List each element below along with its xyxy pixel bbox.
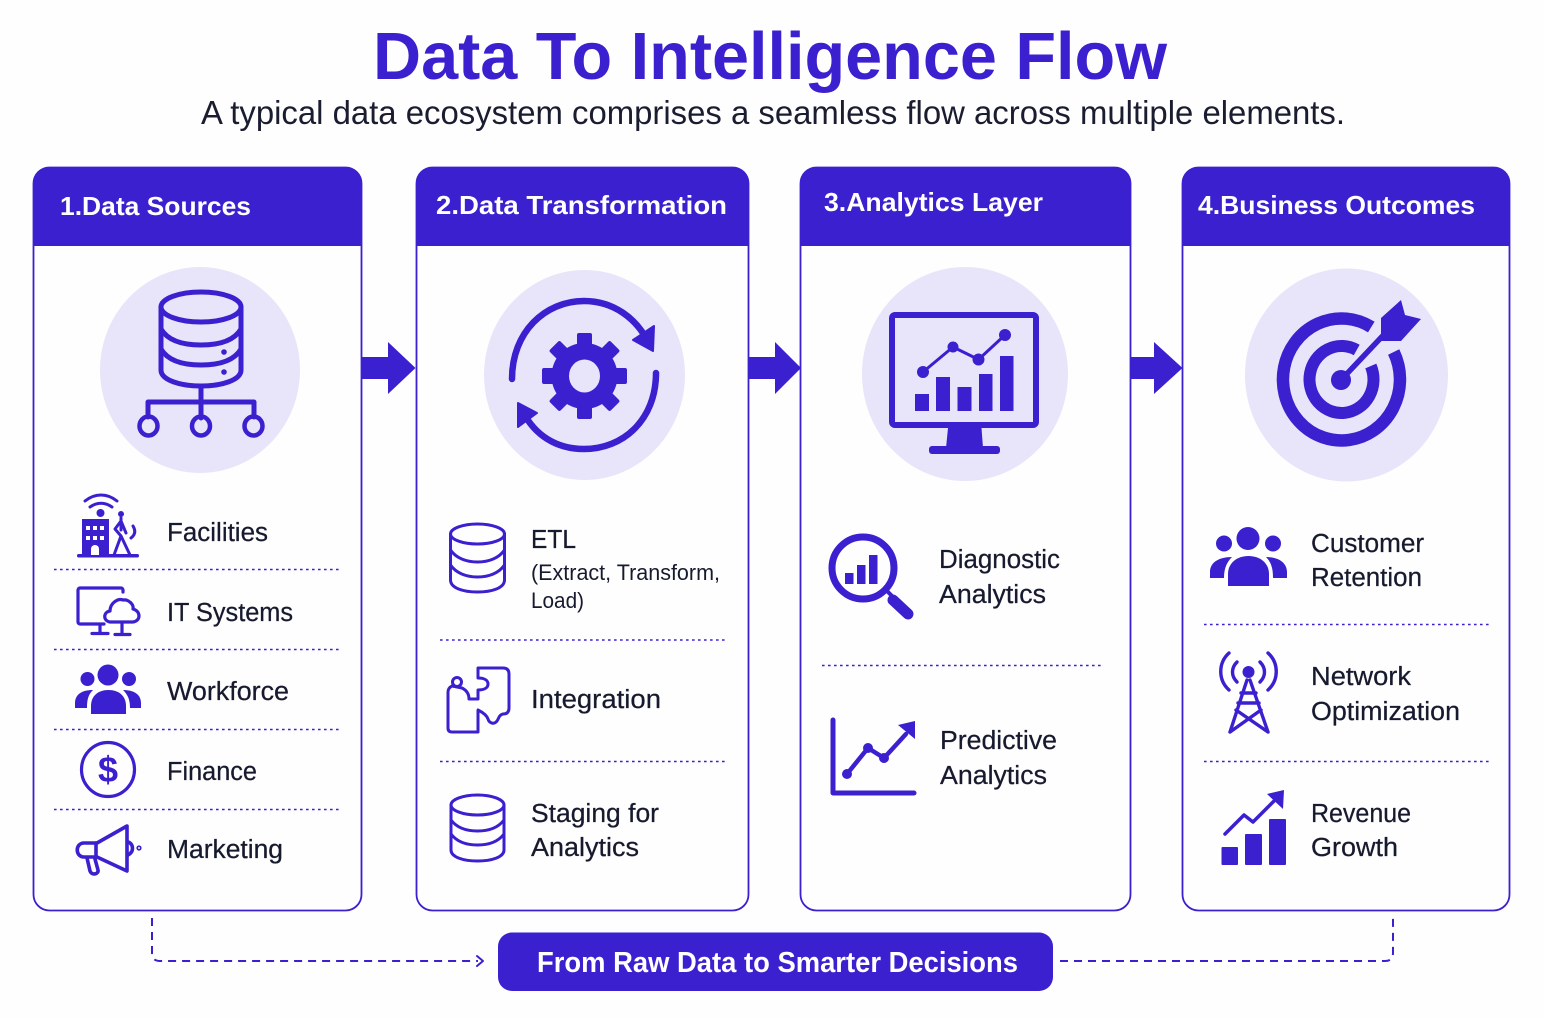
panel: data sources bbox=[33, 167, 362, 910]
text: network optimization bbox=[1311, 663, 1460, 726]
text: diagnostic analytics: Analytics bbox=[939, 581, 1046, 609]
text: network optimization: Optimization bbox=[1311, 698, 1460, 726]
icon: revenue growth bbox=[1222, 790, 1286, 865]
banner: From Raw Data to Smarter Decisions bbox=[537, 947, 1018, 979]
icon: ETL database bbox=[450, 524, 504, 592]
icon: staging database bbox=[451, 795, 504, 861]
icon: IT systems bbox=[78, 588, 139, 634]
label: staging for analytics bbox=[531, 800, 660, 862]
arrow: transformation to analytics bbox=[749, 342, 801, 394]
label: staging for analytics: Staging for bbox=[531, 800, 660, 828]
text: customer retention: Retention bbox=[1311, 564, 1422, 592]
text: predictive analytics: Predictive bbox=[940, 727, 1057, 755]
text: network optimization: Network bbox=[1311, 663, 1411, 691]
text: customer retention bbox=[1311, 530, 1425, 592]
icon: finance bbox=[82, 742, 134, 796]
icon: finance: $ bbox=[98, 749, 118, 790]
icon: predictive chart bbox=[833, 720, 915, 793]
panel: data transformation bbox=[416, 167, 749, 910]
heading: data sources: 1.Data Sources bbox=[60, 191, 251, 221]
icon: facilities bbox=[77, 495, 139, 558]
text: predictive analytics bbox=[940, 727, 1057, 790]
icon: magnifier bbox=[832, 537, 908, 614]
icon: integration puzzle bbox=[448, 668, 509, 732]
text: predictive analytics: Analytics bbox=[940, 762, 1047, 790]
icon: gear cycle bbox=[484, 270, 685, 480]
text: ETL: ETL bbox=[531, 526, 576, 554]
label: facilities: Facilities bbox=[167, 519, 268, 547]
label: finance: Finance bbox=[167, 758, 257, 786]
subtitle: A typical data ecosystem comprises a seamless flow across multiple elements. bbox=[201, 94, 1345, 131]
arrow: sources to transformation bbox=[362, 342, 416, 394]
icon: workforce bbox=[75, 664, 141, 714]
icon: database network bbox=[100, 267, 300, 473]
title: Data To Intelligence Flow bbox=[373, 19, 1168, 94]
icon: marketing bbox=[77, 826, 140, 874]
heading: analytics layer: 3.Analytics Layer bbox=[824, 187, 1043, 217]
icon: customer group bbox=[1210, 527, 1287, 586]
text: revenue growth: Growth bbox=[1311, 834, 1398, 862]
text: ETL: Load) bbox=[531, 588, 584, 613]
label: workforce: Workforce bbox=[167, 678, 289, 706]
icon: monitor chart bbox=[862, 267, 1068, 481]
icon: target with arrow bbox=[1245, 268, 1448, 482]
text: diagnostic analytics bbox=[939, 546, 1060, 609]
icon: network tower bbox=[1221, 653, 1276, 732]
banner bbox=[498, 932, 1053, 991]
heading: data transformation: 2.Data Transformation bbox=[436, 190, 727, 220]
text: customer retention: Customer bbox=[1311, 530, 1425, 558]
connector: dashed arrow from sources to banner bbox=[152, 918, 483, 966]
heading: business outcomes: 4.Business Outcomes bbox=[1198, 190, 1475, 220]
text: ETL bbox=[531, 526, 720, 613]
text: revenue growth: Revenue bbox=[1311, 800, 1411, 828]
panel: analytics layer bbox=[800, 167, 1131, 910]
text: ETL: (Extract, Transform, bbox=[531, 560, 720, 585]
label: integration: Integration bbox=[531, 686, 661, 714]
label: marketing: Marketing bbox=[167, 836, 283, 864]
label: IT systems: IT Systems bbox=[167, 599, 293, 627]
arrow: analytics to outcomes bbox=[1131, 342, 1182, 394]
text: revenue growth bbox=[1311, 800, 1411, 862]
text: diagnostic analytics: Diagnostic bbox=[939, 546, 1060, 574]
panel: business outcomes bbox=[1182, 167, 1510, 910]
connector: dashed line from banner to outcomes bbox=[1060, 918, 1393, 961]
label: staging for analytics: Analytics bbox=[531, 834, 639, 862]
